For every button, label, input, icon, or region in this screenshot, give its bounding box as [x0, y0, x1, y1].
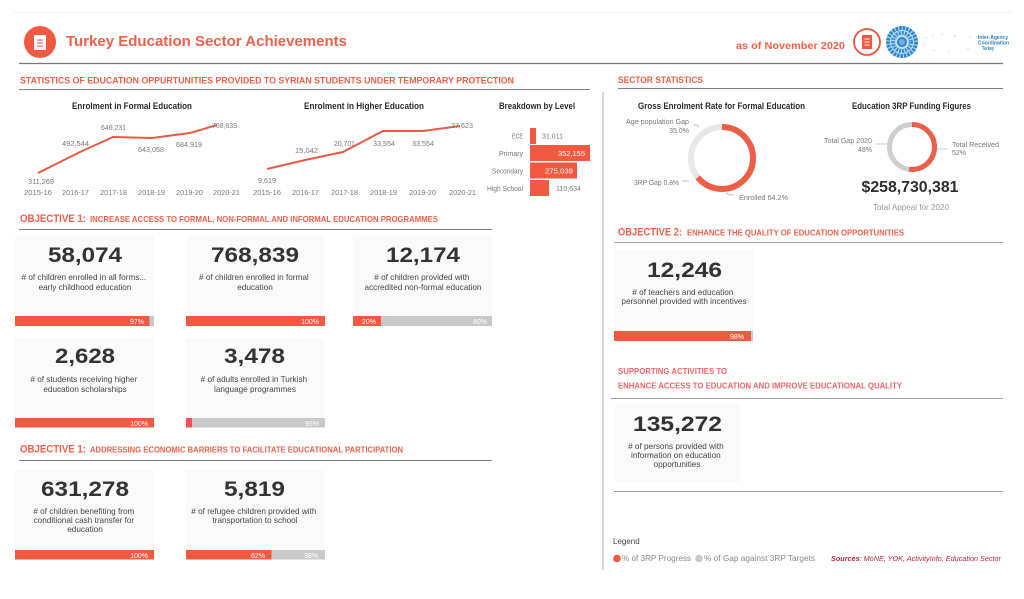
donut chart: education 3RP funding figures: [824, 101, 999, 170]
line chart: enrolment in formal education: 2015-16: [24, 190, 52, 197]
panel: 3,478 adults in Turkish language programmes: language programmes: [214, 385, 296, 394]
heading: objective 1 economic barriers: [20, 444, 403, 456]
panel: 5,819 transportation to school: 62%: [251, 553, 265, 560]
panel: 12,174 accredited non-formal education: accredited non-formal education: [365, 283, 482, 292]
line chart: enrolment in formal education: 2018-19: [138, 190, 165, 197]
line chart: enrolment in formal education: 2017-18: [100, 190, 127, 197]
panel: 3,478 adults in Turkish language programmes: 3,478: [224, 345, 285, 368]
panel: 58,074 children enrolled in all forms: early childhood education: [39, 283, 132, 292]
panel: 135,272 persons provided with information: opportunities: [654, 460, 700, 469]
panel: 5,819 transportation to school: [186, 470, 325, 560]
legend: [613, 537, 815, 563]
donut chart: gross enrolment rate: Enrolled 64.2%: [739, 195, 788, 202]
panel: 2,628 higher education scholarships: [15, 338, 154, 428]
legend: % of Gap against 3RP Targets: [704, 554, 815, 563]
line chart: enrolment in higher education: 20,701: [334, 141, 355, 148]
panel: 5,819 transportation to school: 5,819: [224, 478, 285, 501]
donut chart: education 3RP funding figures: Total Gap 2020: [824, 138, 872, 145]
line chart: enrolment in formal education: 646,231: [101, 125, 126, 132]
title: Turkey Education Sector Achievements: [66, 33, 347, 50]
bar chart: breakdown by level: ECE: [512, 134, 523, 140]
panel: 3,478 adults in Turkish language programmes: # of adults enrolled in Turkish: [201, 375, 308, 384]
line chart: enrolment in higher education: 9,619: [258, 178, 276, 185]
heading: objective 2: OBJECTIVE 2:: [618, 226, 682, 238]
heading: objective 1 access: OBJECTIVE 1:: [20, 213, 86, 225]
donut chart: gross enrolment rate: 35.0%: [669, 128, 689, 135]
panel: 2,628 higher education scholarships: education scholarships: [43, 385, 127, 394]
logo: inter-agency coordination: Coordination: [978, 40, 1009, 46]
heading: supporting activities: SUPPORTING ACTIVITIES TO: [618, 367, 727, 376]
heading: objective 1 access: INCREASE ACCESS TO FORMAL, NON-FORMAL AND INFORMAL EDUCATION PROGRAMMES: [90, 214, 438, 224]
panel: 5,819 transportation to school: # of refugee children provided with: [191, 507, 317, 516]
sources: Sources: MoNE, YOK, ActivityInfo, Education Sector: [831, 554, 1001, 563]
panel: 631,278 conditional cash transfer: [15, 470, 154, 560]
panel: 3,478 adults in Turkish language programmes: 95%: [305, 421, 319, 428]
line chart: enrolment in formal education: 492,544: [62, 141, 89, 148]
logo: United Nations emblem: [886, 26, 918, 58]
line chart: enrolment in higher education: 2015-16: [253, 190, 281, 197]
panel: 135,272 persons provided with information: information on education: [631, 451, 721, 460]
logo: inter-agency coordination: Turkey: [982, 46, 994, 52]
heading: supporting activities: [618, 367, 903, 390]
panel: 12,174 accredited non-formal education: 20%: [362, 319, 376, 326]
panel: 768,839 children enrolled in formal education: [186, 236, 325, 326]
panel: 12,246 teachers and education personnel: # of teachers and education: [632, 288, 734, 297]
line chart: enrolment in formal education: 768,839: [212, 123, 237, 130]
line chart: enrolment in higher education: 15,042: [295, 148, 318, 155]
heading: objective 1 economic barriers: ADDRESSING ECONOMIC BARRIERS TO FACILITATE EDUCATIONAL PARTICIPATION: [90, 444, 403, 454]
panel: 768,839 children enrolled in formal education: # of children enrolled in formal: [199, 273, 309, 282]
panel: 631,278 conditional cash transfer: conditional cash transfer for: [34, 516, 134, 525]
heading: objective 2: ENHANCE THE QUALITY OF EDUCATION OPPORTUNITIES: [687, 228, 904, 238]
panel: 5,819 transportation to school: 38%: [304, 553, 318, 560]
panel: 768,839 children enrolled in formal education: 100%: [301, 319, 319, 326]
line chart: enrolment in higher education: 33,554: [373, 141, 395, 148]
bar chart: breakdown by level: 352,155: [558, 151, 585, 158]
line chart: enrolment in higher education: 2019-20: [409, 190, 436, 197]
panel: 631,278 conditional cash transfer: 100%: [130, 553, 148, 560]
donut chart: gross enrolment rate: Gross Enrolment Rate for Formal Education: [638, 101, 805, 111]
legend: % of 3RP Progress: [622, 554, 691, 563]
total appeal figure: $258,730,381: [862, 179, 959, 196]
panel: 12,246 teachers and education personnel: personnel provided with incentives: [621, 297, 747, 306]
panel: 631,278 conditional cash transfer: # of children benefiting from: [33, 507, 135, 516]
total appeal figure: Total Appeal for 2020: [873, 202, 949, 212]
line chart: enrolment in formal education: 643,058: [138, 147, 164, 154]
panel: 12,174 accredited non-formal education: 80%: [473, 319, 487, 326]
line chart: enrolment in higher education: 2016-17: [292, 190, 319, 197]
panel: 631,278 conditional cash transfer: education: [67, 525, 103, 534]
line chart: enrolment in formal education: [24, 101, 240, 197]
panel: 768,839 children enrolled in formal education: education: [237, 283, 273, 292]
donut chart: education 3RP funding figures: 52%: [952, 150, 966, 157]
panel: 135,272 persons provided with information: 135,272: [633, 413, 722, 436]
donut chart: education 3RP funding figures: Total Received: [952, 142, 999, 149]
donut chart: education 3RP funding figures: Education 3RP Funding Figures: [852, 101, 971, 111]
line chart: enrolment in formal education: 2020-21: [213, 190, 240, 197]
panel: 12,174 accredited non-formal education: # of children provided with: [374, 273, 470, 282]
line chart: enrolment in higher education: 33,554: [412, 141, 434, 148]
bar chart: breakdown by level: High School: [487, 186, 523, 193]
bar chart: breakdown by level: Secondary: [492, 168, 523, 176]
panel: 3,478 adults in Turkish language programmes: [186, 338, 325, 428]
panel: 12,246 teachers and education personnel: 98%: [730, 334, 744, 341]
panel: 12,174 accredited non-formal education: [353, 236, 492, 326]
logo: inter-agency coordination: Inter-Agency: [978, 35, 1008, 41]
panel: 58,074 children enrolled in all forms: 58,074: [48, 244, 122, 267]
heading: objective 1 economic barriers: OBJECTIVE 1:: [20, 444, 86, 456]
legend: Legend: [613, 537, 640, 546]
heading: objective 2: [618, 226, 904, 238]
panel: 2,628 higher education scholarships: 2,628: [55, 345, 115, 368]
panel: 5,819 transportation to school: transportation to school: [212, 516, 298, 525]
bar chart: breakdown by level: Primary: [499, 151, 523, 158]
line chart: enrolment in higher education: [253, 101, 476, 197]
panel: 12,246 teachers and education personnel: 12,246: [647, 259, 722, 282]
icon: education notebook: [24, 26, 56, 58]
panel: 58,074 children enrolled in all forms: [15, 236, 154, 326]
line chart: enrolment in higher education: 27,623: [451, 123, 473, 130]
panel: 58,074 children enrolled in all forms: # of children enrolled in all forms...: [22, 273, 146, 282]
line chart: enrolment in formal education: 311,269: [28, 179, 54, 186]
panel: 135,272 persons provided with information: # of persons provided with: [628, 442, 724, 451]
line chart: enrolment in higher education: 2017-18: [331, 190, 358, 197]
panel: 631,278 conditional cash transfer: 631,278: [41, 478, 129, 501]
line chart: enrolment in formal education: 684,919: [176, 142, 202, 149]
panel: 2,628 higher education scholarships: 100%: [130, 421, 148, 428]
bar chart: breakdown by level: Breakdown by Level: [499, 101, 575, 111]
heading: statistics of education opportunities: STATISTICS OF EDUCATION OPPURTUNITIES PROVIDED TO SYRIAN STUDENTS UNDER TEMPORARY PROTECTION: [20, 76, 514, 86]
panel: 12,246 teachers and education personnel: [614, 250, 753, 341]
icon: outlined education notebook: [854, 29, 880, 55]
line chart: enrolment in formal education: 2019-20: [176, 190, 203, 197]
panel: 135,272 persons provided with information: [615, 404, 740, 482]
donut chart: gross enrolment rate: 3RP Gap 0.8%: [634, 180, 679, 187]
panel: 2,628 higher education scholarships: # of students receiving higher: [30, 375, 138, 384]
line chart: enrolment in higher education: 2020-21: [449, 190, 476, 197]
panel: 768,839 children enrolled in formal education: 768,839: [211, 244, 299, 267]
bar chart: breakdown by level: 110,634: [556, 186, 581, 193]
donut chart: education 3RP funding figures: 48%: [858, 147, 872, 154]
bar chart: breakdown by level: 275,039: [545, 168, 573, 176]
heading: objective 1 access: [20, 213, 438, 225]
heading: supporting activities: ENHANCE ACCESS TO EDUCATION AND IMPROVE EDUCATIONAL QUALITY: [618, 382, 903, 390]
line chart: enrolment in formal education: Enrolment in Formal Education: [72, 101, 192, 111]
line chart: enrolment in higher education: 2018-19: [370, 190, 397, 197]
total appeal figure: [862, 179, 959, 212]
line chart: enrolment in higher education: Enrolment in Higher Education: [304, 101, 424, 111]
logo: inter-agency coordination: [924, 33, 1009, 52]
donut chart: gross enrolment rate: [626, 101, 805, 202]
date label: as of November 2020: [736, 40, 845, 52]
heading: sector statistics: SECTOR STATISTICS: [618, 75, 703, 86]
bar chart: breakdown by level: 31,011: [542, 134, 563, 140]
bar chart: breakdown by level: [487, 101, 590, 196]
line chart: enrolment in formal education: 2016-17: [62, 190, 89, 197]
panel: 58,074 children enrolled in all forms: 97%: [130, 319, 144, 326]
panel: 12,174 accredited non-formal education: 12,174: [386, 244, 460, 267]
donut chart: gross enrolment rate: Age population Gap: [626, 119, 689, 126]
